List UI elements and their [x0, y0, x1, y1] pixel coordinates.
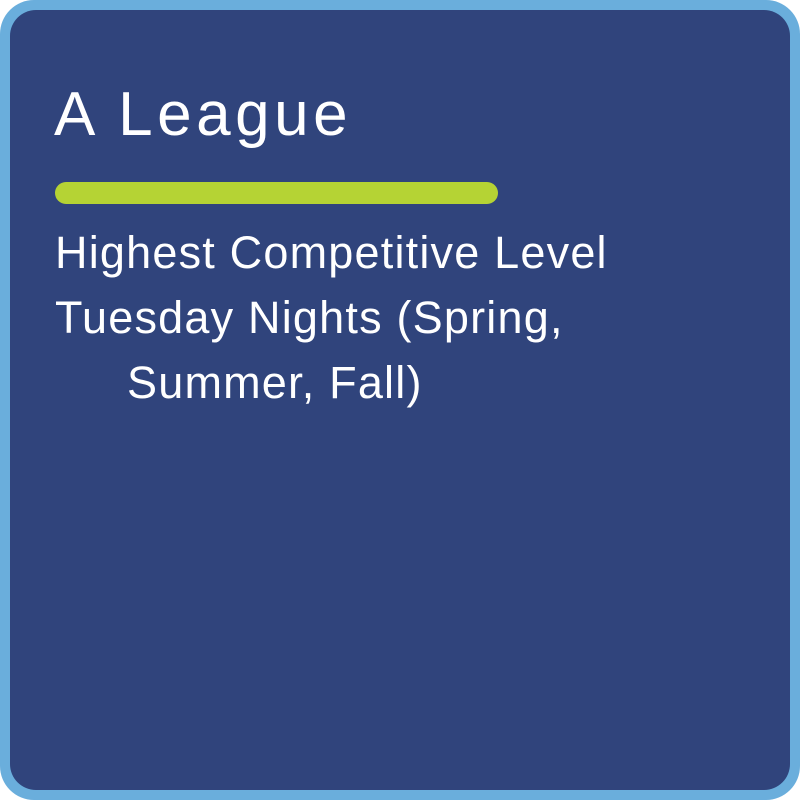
- text block: seasons: Summer, Fall): [127, 357, 423, 408]
- text block: schedule: Tuesday Nights (Spring,: [55, 292, 564, 343]
- accent bar: [55, 182, 498, 204]
- text block: level: Highest Competitive Level: [55, 227, 608, 278]
- title: A League: [54, 80, 352, 149]
